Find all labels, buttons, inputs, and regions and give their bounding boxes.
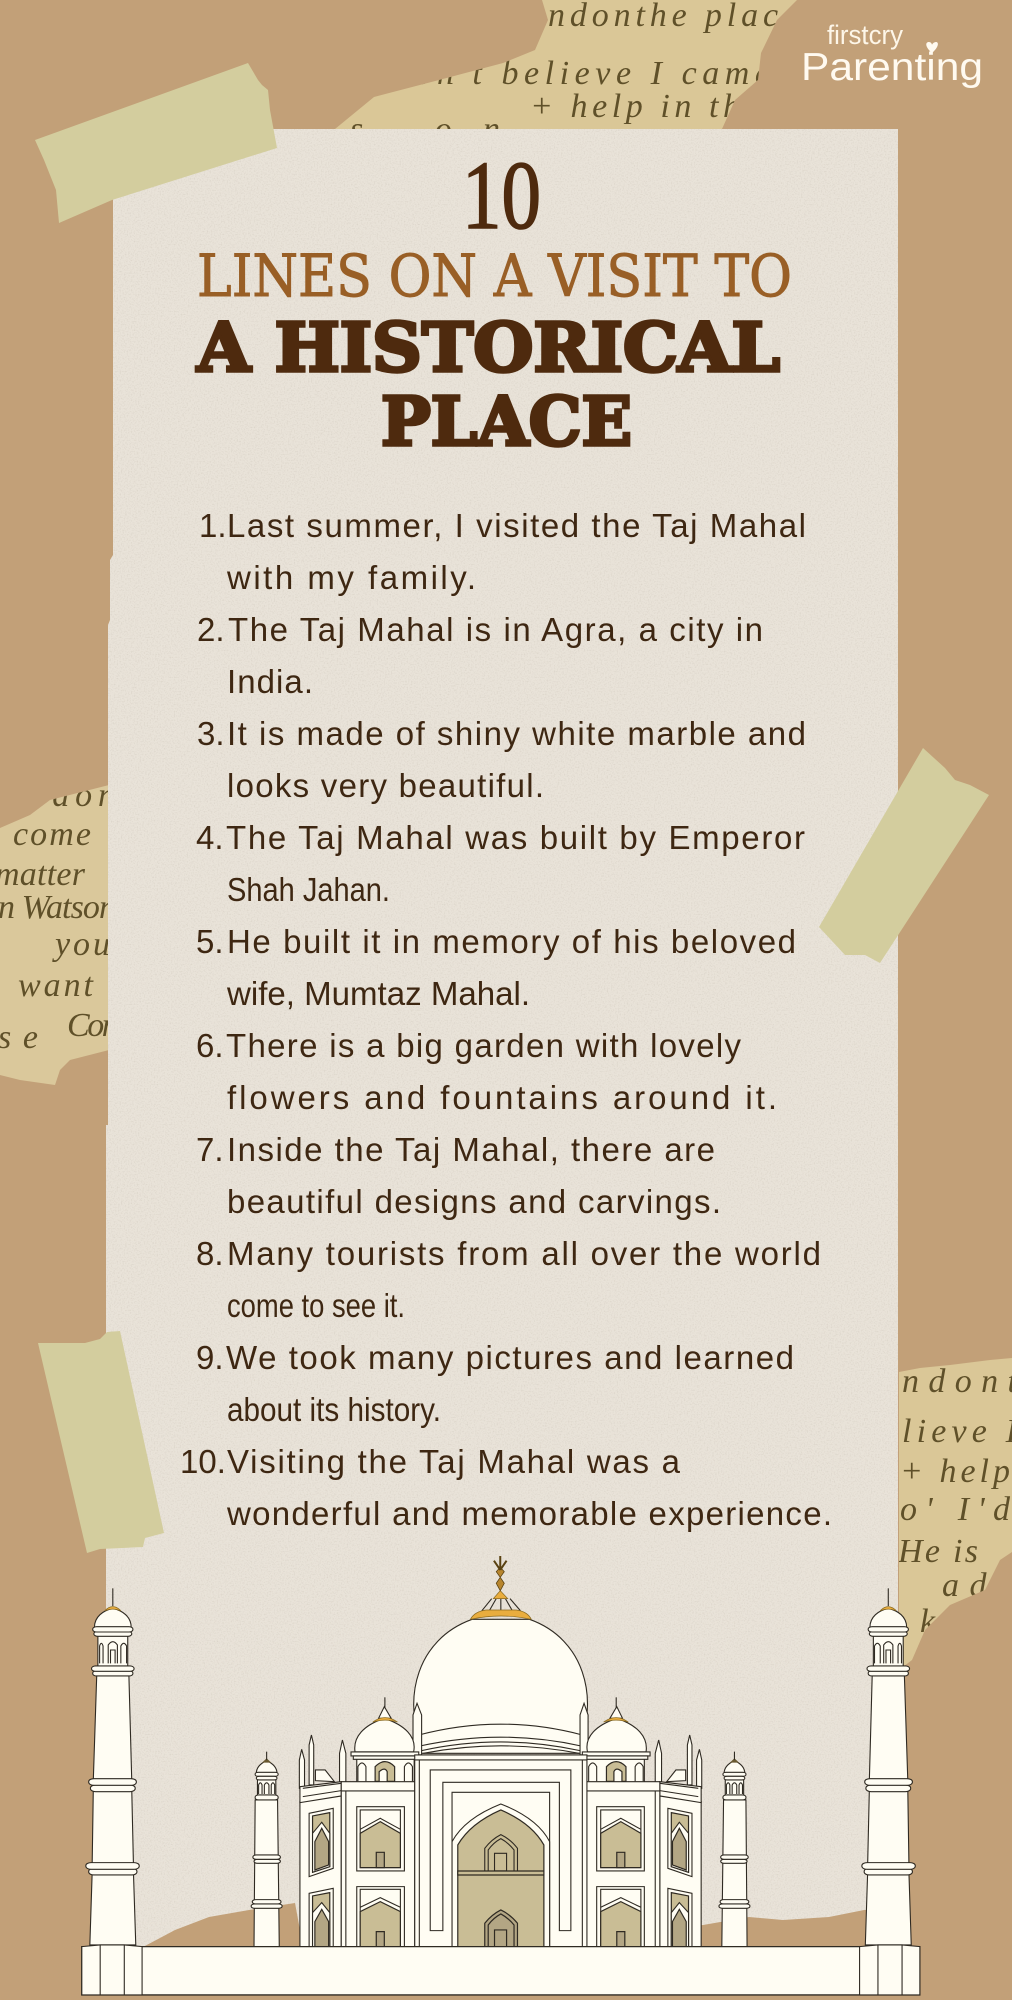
title: number 10: 10 — [462, 142, 541, 250]
item 7: 7. — [196, 1131, 224, 1168]
main dome — [413, 1556, 588, 1755]
paper sheet — [106, 129, 899, 1947]
item 6 — [196, 1027, 777, 1116]
title: place: PLACE — [381, 382, 632, 461]
title: lines on a visit to: LINES ON A VISIT TO — [197, 242, 792, 310]
torn note scrap: left: Come — [67, 1007, 139, 1044]
item 3: looks very beautiful. — [227, 767, 544, 804]
torn note scrap: left: you — [52, 926, 110, 963]
item 5 — [196, 923, 796, 1012]
torn note scrap: right: + help — [900, 1453, 1010, 1490]
torn note scrap: right — [895, 1355, 1012, 1675]
item 1: 1. — [199, 507, 227, 544]
item 10 — [180, 1443, 832, 1532]
item 10: Visiting the Taj Mahal was a — [227, 1443, 681, 1480]
platform base — [82, 1945, 920, 1995]
item 2 — [197, 611, 763, 700]
item 8: 8. — [196, 1235, 224, 1272]
item 3 — [197, 715, 806, 804]
tape: right — [819, 748, 989, 963]
tape: top left — [35, 63, 277, 223]
item 7: beautiful designs and carvings. — [227, 1183, 721, 1220]
item 7 — [196, 1131, 721, 1220]
left half — [86, 1588, 419, 1947]
item 10: wonderful and memorable experience. — [226, 1495, 832, 1532]
torn note scrap: left: -don — [35, 777, 115, 814]
torn note scrap: left — [0, 785, 108, 1085]
item 5: 5. — [196, 923, 224, 960]
item 3: 3. — [197, 715, 225, 752]
item 2: The Taj Mahal is in Agra, a city in — [228, 611, 763, 648]
right half — [582, 1588, 915, 1947]
torn note scrap: top — [335, 0, 797, 129]
item 7: Inside the Taj Mahal, there are — [227, 1131, 715, 1168]
torn note scrap: left: want — [18, 967, 95, 1004]
item 2: 2. — [197, 611, 225, 648]
item 6: 6. — [196, 1027, 224, 1064]
item 2: India. — [227, 663, 313, 700]
item 9 — [196, 1339, 794, 1428]
item 4 — [196, 819, 805, 908]
logo: heart — [926, 42, 938, 53]
item 4: 4. — [196, 819, 224, 856]
item 1: Last summer, I visited the Taj Mahal — [227, 507, 806, 544]
torn note scrap: right: o' I'd — [900, 1491, 1011, 1528]
item 8 — [196, 1235, 821, 1324]
item 6: flowers and fountains around it. — [227, 1079, 777, 1116]
item 8: come to see it. — [227, 1287, 405, 1324]
item 1: with my family. — [226, 559, 476, 596]
item 9: 9. — [196, 1339, 224, 1376]
central portal — [415, 1755, 587, 1947]
torn note scrap: right: He is — [897, 1533, 978, 1570]
illustration: Taj Mahal — [82, 1556, 920, 1995]
torn note scrap: top: s on — [350, 111, 500, 148]
torn note scrap: right: k — [920, 1603, 936, 1640]
torn note scrap: top: + help in th — [530, 88, 740, 125]
torn note scrap: right: adv — [942, 1567, 1012, 1604]
item 1 — [199, 507, 806, 596]
item 5: wife, Mumtaz Mahal. — [226, 975, 530, 1012]
torn note scrap: left: n Watson — [0, 889, 116, 926]
title: a historical: A HISTORICAL — [196, 308, 780, 387]
item 9: about its history. — [227, 1391, 441, 1428]
item 4: Shah Jahan. — [227, 871, 390, 908]
item 10: 10. — [180, 1443, 226, 1480]
torn note scrap: top: -don't believe I came — [375, 55, 770, 92]
logo — [801, 20, 983, 89]
tape: lower left — [38, 1331, 164, 1553]
item 6: There is a big garden with lovely — [226, 1027, 742, 1064]
logo: firstcry: firstcry — [827, 20, 903, 50]
numbered list — [180, 507, 832, 1532]
title — [196, 142, 792, 461]
item 9: We took many pictures and learned — [226, 1339, 794, 1376]
item 4: The Taj Mahal was built by Emperor — [226, 819, 805, 856]
item 3: It is made of shiny white marble and — [227, 715, 806, 752]
logo: Parenting: Parenting — [801, 46, 983, 89]
item 8: Many tourists from all over the world — [227, 1235, 821, 1272]
item 5: He built it in memory of his beloved — [227, 923, 796, 960]
torn note scrap: left: come — [13, 816, 91, 853]
